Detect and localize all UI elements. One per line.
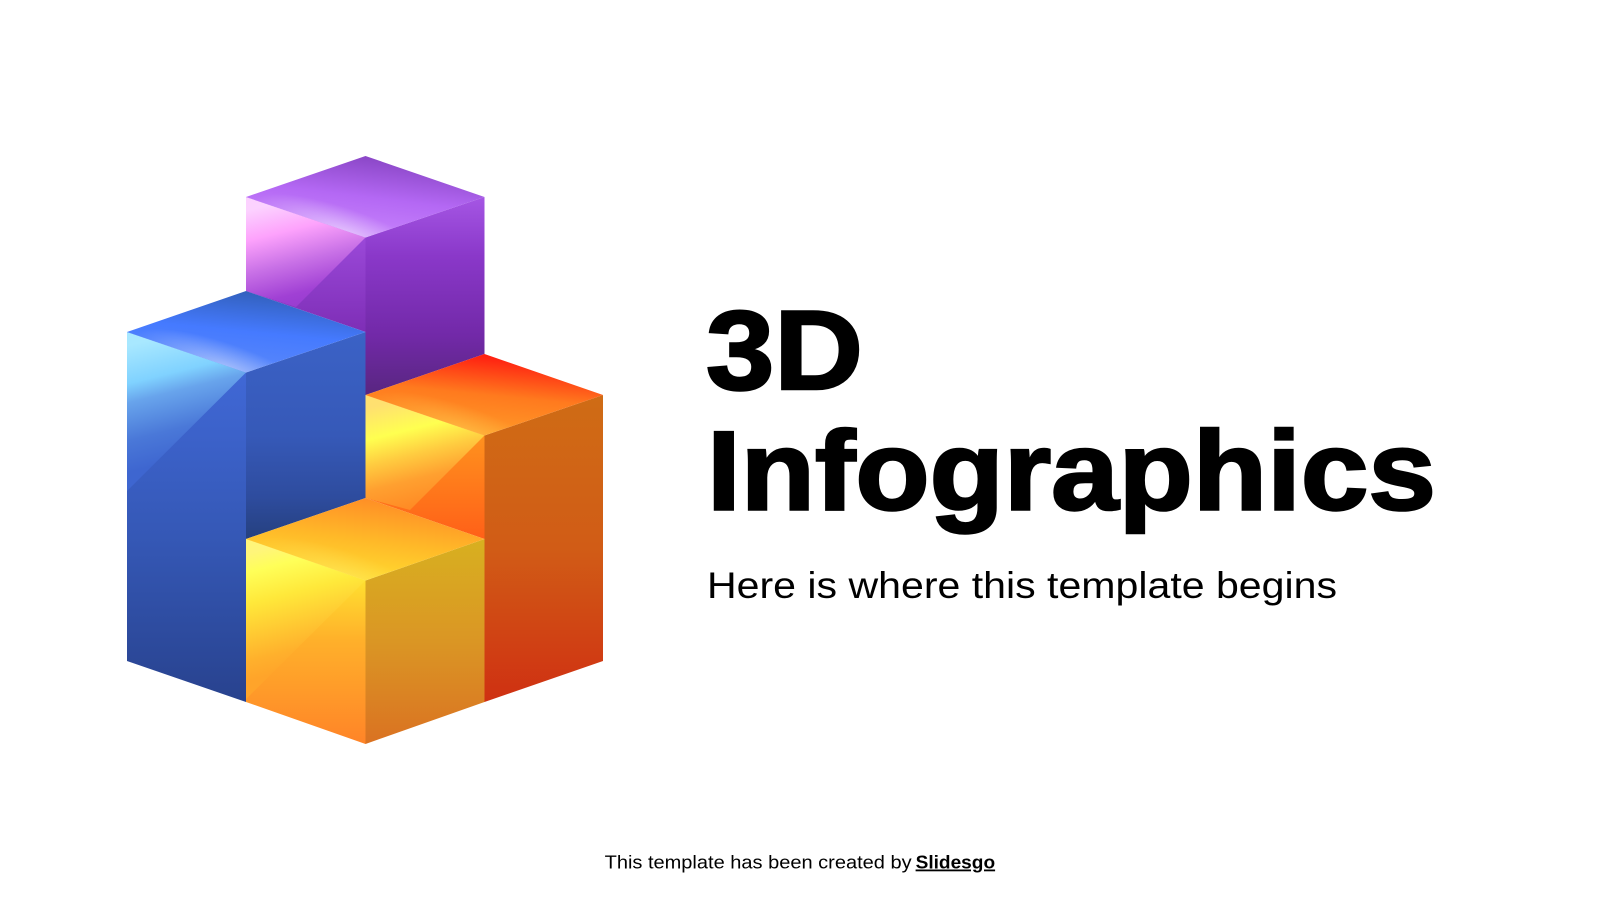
title: Infographics (707, 408, 1436, 534)
footer credit: This template has been created by (605, 852, 912, 872)
blue column (127, 291, 366, 702)
yellow column (246, 498, 484, 744)
subtitle: Here is where this template begins (707, 565, 1337, 606)
title (706, 288, 1436, 534)
purple column (246, 156, 484, 395)
icon: 3D stacked cube columns (127, 156, 603, 744)
orange column (366, 354, 603, 702)
title: 3D (706, 288, 863, 413)
footer credit: Slidesgo (916, 852, 995, 872)
